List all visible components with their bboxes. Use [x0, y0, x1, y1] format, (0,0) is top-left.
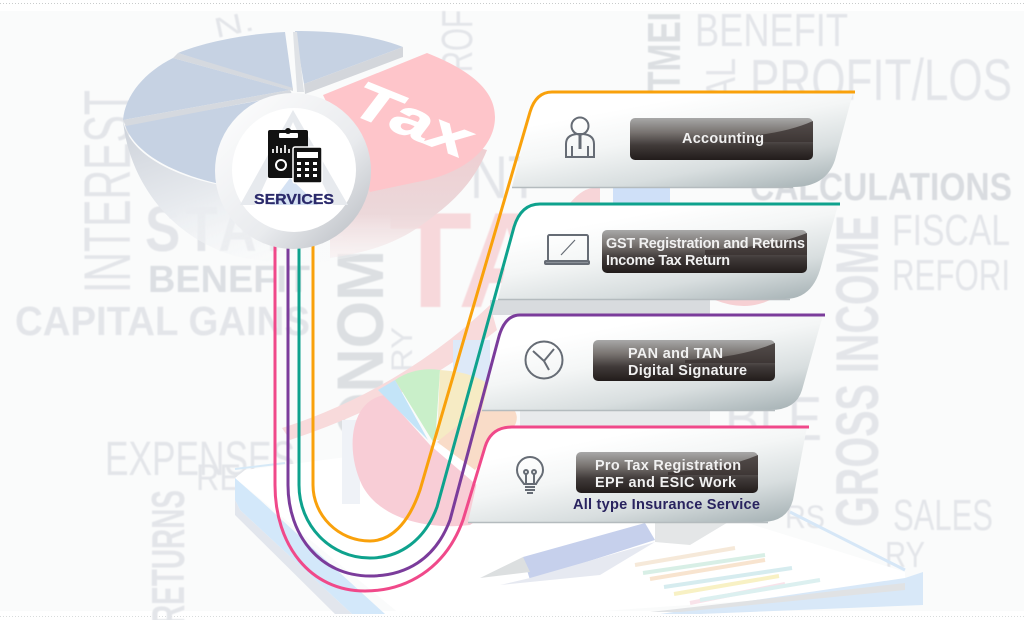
background word cloud: CAPITAL GAINS — [15, 298, 310, 344]
services badge — [215, 93, 371, 249]
button: GST — [602, 230, 807, 273]
button: Pro Tax — [576, 452, 758, 493]
button: PAN — [593, 340, 775, 381]
panel: GST and Income Tax — [498, 205, 838, 300]
background word cloud: RY — [386, 327, 419, 372]
background word cloud: ONOM — [323, 250, 397, 440]
pie slice: top — [178, 32, 293, 90]
pie slice: Tax — [323, 53, 495, 192]
button: PAN: Digital Signature — [628, 363, 747, 379]
background word cloud: N. — [211, 5, 257, 44]
icon: light bulb — [517, 457, 543, 493]
insurance note: All type Insurance Service — [573, 497, 760, 513]
icon: clipboard and calculator — [268, 128, 322, 183]
3D pie chart with Tax slice — [123, 31, 495, 263]
background word cloud: BENEFIT — [695, 4, 848, 56]
pale TAX lettering: X — [556, 184, 647, 336]
background word cloud: STAT — [145, 193, 295, 265]
background word cloud: BLE — [725, 385, 822, 454]
background word cloud: RS — [785, 499, 825, 535]
background word cloud: BENEFIT — [148, 259, 310, 301]
icon: clock — [526, 342, 562, 378]
line: orange to Accounting — [313, 92, 855, 541]
background word cloud: AL — [697, 58, 744, 100]
pie chart illustration — [353, 369, 517, 526]
ledger rows illustration — [635, 548, 820, 603]
button: GST: GST Registration and Returns — [606, 236, 805, 252]
line: pink to Pro Tax — [275, 240, 809, 591]
panel: Pro Tax and EPF — [468, 427, 807, 522]
panel: PAN and TAN — [482, 315, 823, 410]
button: Pro Tax: Pro Tax Registration — [595, 458, 741, 474]
pie slice: left — [123, 58, 290, 120]
button: GST: Income Tax Return — [606, 253, 730, 269]
button: Pro Tax: EPF and ESIC Work — [595, 475, 737, 491]
background word cloud: RY — [885, 534, 925, 575]
pie slice: bottom left — [125, 95, 300, 191]
connector lines — [275, 92, 855, 591]
line: teal to GST — [299, 204, 840, 558]
pale TAX lettering: T — [389, 184, 472, 336]
pie slice: top right — [295, 31, 403, 84]
strips behind panels — [490, 188, 770, 427]
pale TAX lettering: A — [458, 184, 556, 336]
background word cloud: RE — [196, 457, 241, 498]
line: purple to PAN — [288, 240, 825, 576]
button: PAN: PAN and TAN — [628, 346, 723, 362]
background word cloud: EXPENSES — [105, 433, 295, 486]
pale TAX lettering — [389, 184, 647, 336]
icon: person with tie — [566, 118, 594, 157]
Tax label: Tax — [345, 70, 482, 171]
badge label: SERVICES — [254, 191, 334, 208]
background word cloud: GROSS INCOME — [824, 215, 891, 527]
background illustration: ledger, chart and pen — [235, 188, 923, 614]
background word cloud: NT — [470, 144, 540, 211]
button: Accounting — [630, 118, 813, 160]
button: Accounting: Accounting — [682, 131, 764, 147]
badge triangle — [240, 110, 348, 205]
icon: laptop — [545, 235, 589, 264]
background word cloud: RETURNS — [142, 490, 194, 620]
panel: Accounting — [512, 93, 853, 188]
pen illustration — [480, 518, 735, 585]
